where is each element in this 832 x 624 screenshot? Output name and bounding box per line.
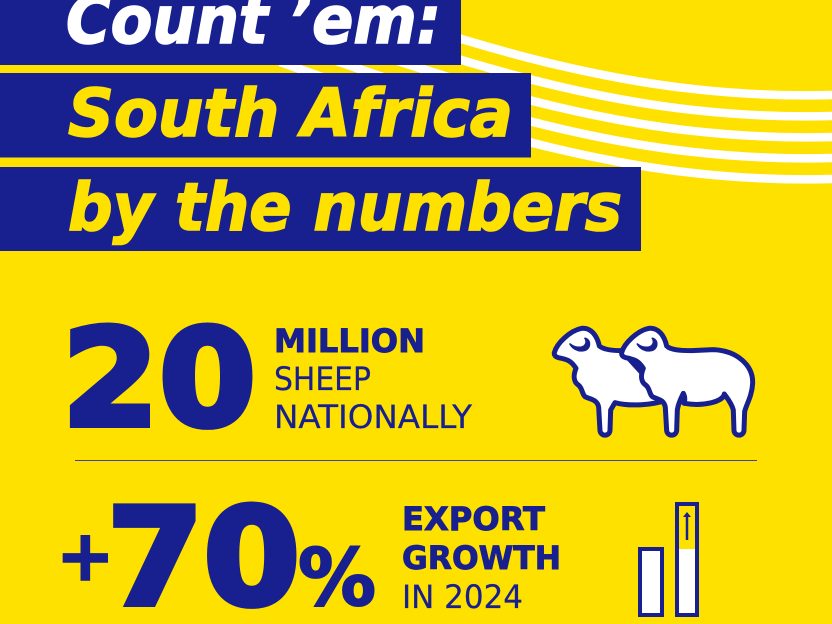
label: million sheep nationally	[274, 322, 472, 436]
label: export growth in 2024: EXPORT	[402, 500, 545, 538]
label: million sheep nationally: NATIONALLY	[274, 398, 472, 436]
label: million sheep nationally: MILLION	[274, 322, 425, 360]
icon: bar chart with up arrow	[640, 504, 697, 615]
title banner	[0, 0, 641, 251]
stat: +70% export growth	[56, 480, 697, 624]
title line 3: by the numbers	[68, 169, 622, 246]
stat: 20 million sheep	[62, 301, 753, 457]
title line 2: South Africa	[68, 75, 513, 152]
label: export growth in 2024: IN 2024	[402, 578, 523, 616]
number +70%	[56, 480, 376, 624]
label: export growth in 2024	[402, 500, 561, 616]
icon: two sheep	[554, 328, 753, 435]
label: million sheep nationally: SHEEP	[274, 360, 371, 398]
label: export growth in 2024: GROWTH	[402, 539, 561, 577]
number 20: 20	[62, 301, 256, 457]
number +70%: +	[56, 515, 115, 597]
number +70%: %	[298, 534, 376, 624]
